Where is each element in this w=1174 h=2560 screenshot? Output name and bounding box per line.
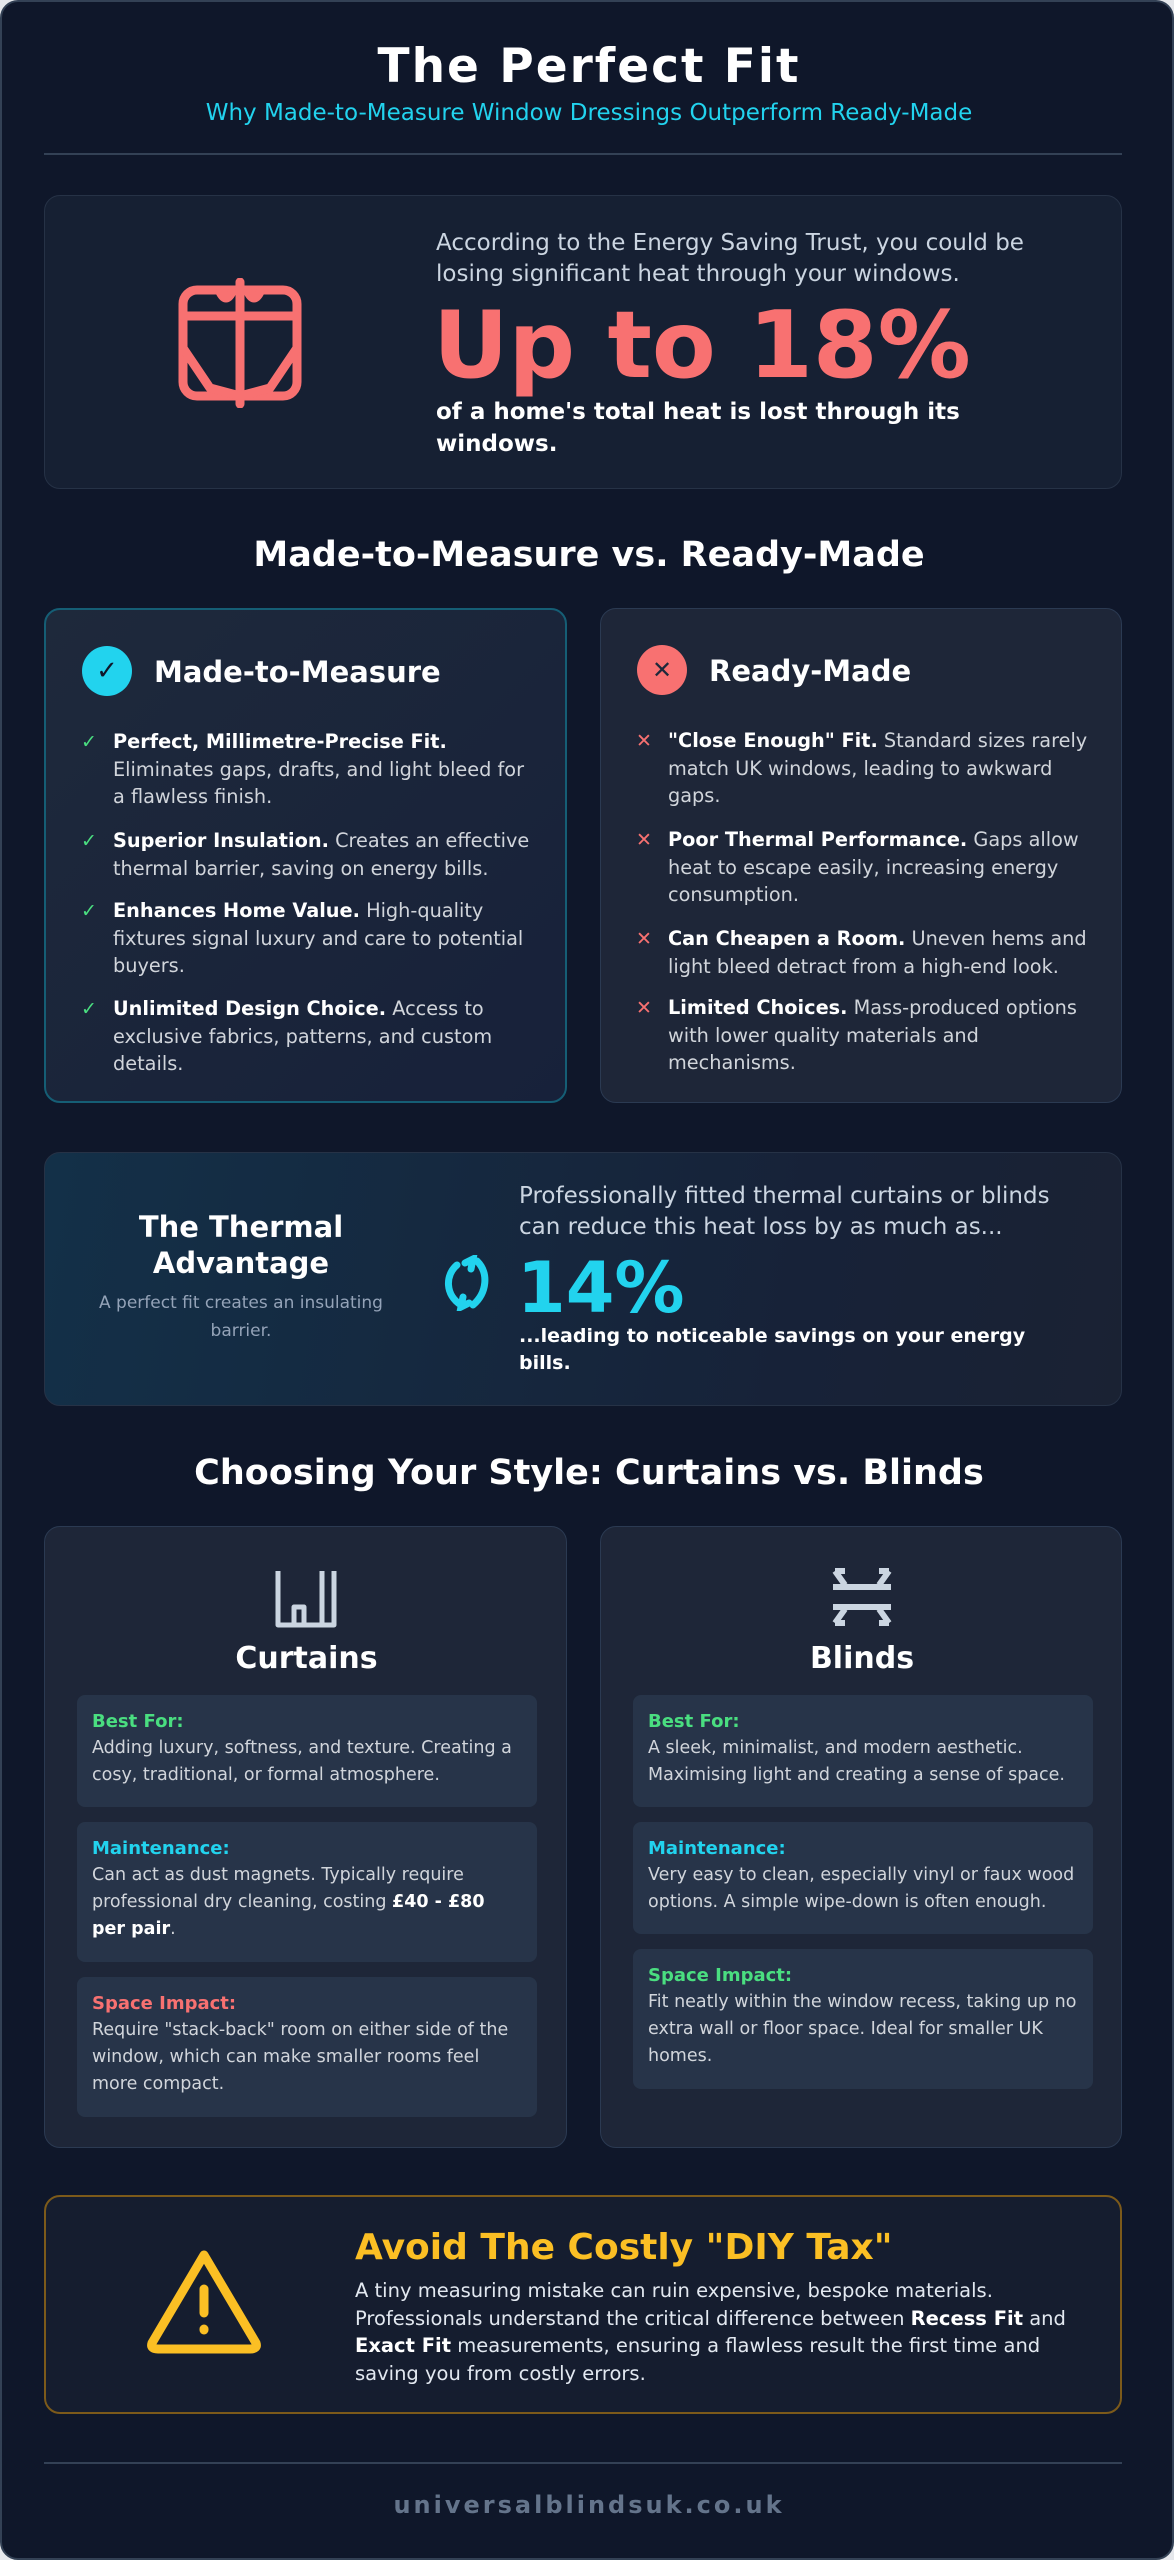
box: maintenance: Maintenance: [92, 1838, 230, 1859]
panel: ready-made: ✕ [636, 829, 652, 851]
text: subtitle: A perfect fit creates an insulating barrier. [99, 1293, 383, 1341]
text: stat intro: According to the Energy Saving Trust, you could be losing significant heat through your windows. [436, 230, 1024, 287]
box: space impact: Require "stack-back" room on either side of the window, which can make smaller rooms feel more compact. [92, 2020, 508, 2094]
icon: check circle: ✓ [96, 656, 118, 686]
text: intro: Professionally fitted thermal curtains or blinds can reduce this heat loss by as much as... [519, 1183, 1050, 1240]
box: space impact [77, 1977, 537, 2117]
box: maintenance: Can act as dust magnets. Typically require professional dry cleaning, costing £40 - £80 per pair. [92, 1865, 485, 1939]
panel: blinds [600, 1526, 1122, 2148]
box: maintenance [633, 1822, 1093, 1934]
panel: made-to-measure: ✓ [81, 900, 97, 922]
box: space impact: Fit neatly within the window recess, taking up no extra wall or floor space. Ideal for smaller UK homes. [648, 1992, 1076, 2066]
list item: Can Cheapen a Room. Uneven hems and light bleed detract from a high-end look. [668, 927, 1087, 978]
footer: universalblindsuk.co.uk [393, 2491, 785, 2519]
heading: Made-to-Measure [154, 655, 441, 689]
heading: style: Choosing Your Style: Curtains vs. Blinds [194, 1453, 984, 1493]
icon: cross circle [637, 645, 687, 695]
box: best for: Best For: [648, 1711, 740, 1732]
list item: Poor Thermal Performance. Gaps allow heat to escape easily, increasing energy consumption. [668, 828, 1079, 906]
big number: Up to 18% [433, 291, 971, 399]
box: maintenance [77, 1822, 537, 1962]
subtitle: Why Made-to-Measure Window Dressings Outperform Ready-Made [206, 100, 972, 126]
list item: Superior Insulation. Creates an effective thermal barrier, saving on energy bills. [113, 829, 529, 880]
heading: Curtains [235, 1641, 378, 1676]
list item: Limited Choices. Mass-produced options with lower quality materials and mechanisms. [668, 996, 1077, 1074]
heading: The Thermal Advantage [139, 1210, 343, 1280]
list item: "Close Enough" Fit. Standard sizes rarely match UK windows, leading to awkward gaps. [668, 729, 1087, 807]
panel: curtains [44, 1526, 567, 2148]
icon: check circle [82, 646, 132, 696]
panel: ready-made: ✕ [636, 997, 652, 1019]
panel: ready-made [600, 608, 1122, 1103]
box: space impact: Space Impact: [648, 1965, 792, 1986]
panel: made-to-measure: ✓ [81, 731, 97, 753]
box: space impact: Space Impact: [92, 1993, 236, 2014]
text: caption: ...leading to noticeable savings on your energy bills. [519, 1325, 1025, 1374]
box: best for: Adding luxury, softness, and texture. Creating a cosy, traditional, or formal atmosphere. [92, 1738, 512, 1785]
panel: made-to-measure [44, 608, 567, 1103]
panel: thermal advantage [44, 1152, 1122, 1406]
panel: heat loss stat [44, 195, 1122, 489]
heading: Avoid The Costly "DIY Tax" [355, 2227, 893, 2268]
icon: curtains [276, 1571, 336, 1628]
heading: comparison: Made-to-Measure vs. Ready-Made [253, 535, 925, 575]
list item: Enhances Home Value. High-quality fixtures signal luxury and care to potential buyers. [113, 899, 523, 977]
box: best for: Best For: [92, 1711, 184, 1732]
icon: recycle arrows [444, 1255, 488, 1311]
panel: made-to-measure: ✓ [81, 830, 97, 852]
panel: ready-made: ✕ [636, 928, 652, 950]
box: maintenance: Maintenance: [648, 1838, 786, 1859]
text: stat caption: of a home's total heat is lost through its windows. [436, 399, 960, 457]
panel: made-to-measure: ✓ [81, 998, 97, 1020]
panel: DIY warning [44, 2195, 1122, 2414]
panel: ready-made: ✕ [636, 730, 652, 752]
box: space impact [633, 1949, 1093, 2089]
heading: Ready-Made [709, 654, 911, 688]
icon: warning [147, 2250, 261, 2354]
big number: 14% [517, 1247, 685, 1329]
icon: window heat [178, 278, 302, 408]
box: best for [633, 1695, 1093, 1807]
box: best for [77, 1695, 537, 1807]
box: maintenance: Very easy to clean, especially vinyl or faux wood options. A simple wipe-down is often enough. [648, 1865, 1074, 1912]
icon: cross circle: ✕ [652, 656, 672, 684]
text: A tiny measuring mistake can ruin expensive, bespoke materials. Professionals understand the critical difference between Recess Fit and Exact Fit measurements, ensuring a flawless result the first time and saving you from costly errors. [355, 2279, 1066, 2384]
heading: Blinds [810, 1641, 914, 1676]
title: The Perfect Fit [378, 39, 800, 94]
box: best for: A sleek, minimalist, and modern aesthetic. Maximising light and creating a sense of space. [648, 1738, 1065, 1785]
list item: Unlimited Design Choice. Access to exclusive fabrics, patterns, and custom details. [113, 997, 492, 1075]
list item: Perfect, Millimetre-Precise Fit. Eliminates gaps, drafts, and light bleed for a flawless finish. [113, 730, 524, 808]
icon: blinds [832, 1568, 892, 1626]
